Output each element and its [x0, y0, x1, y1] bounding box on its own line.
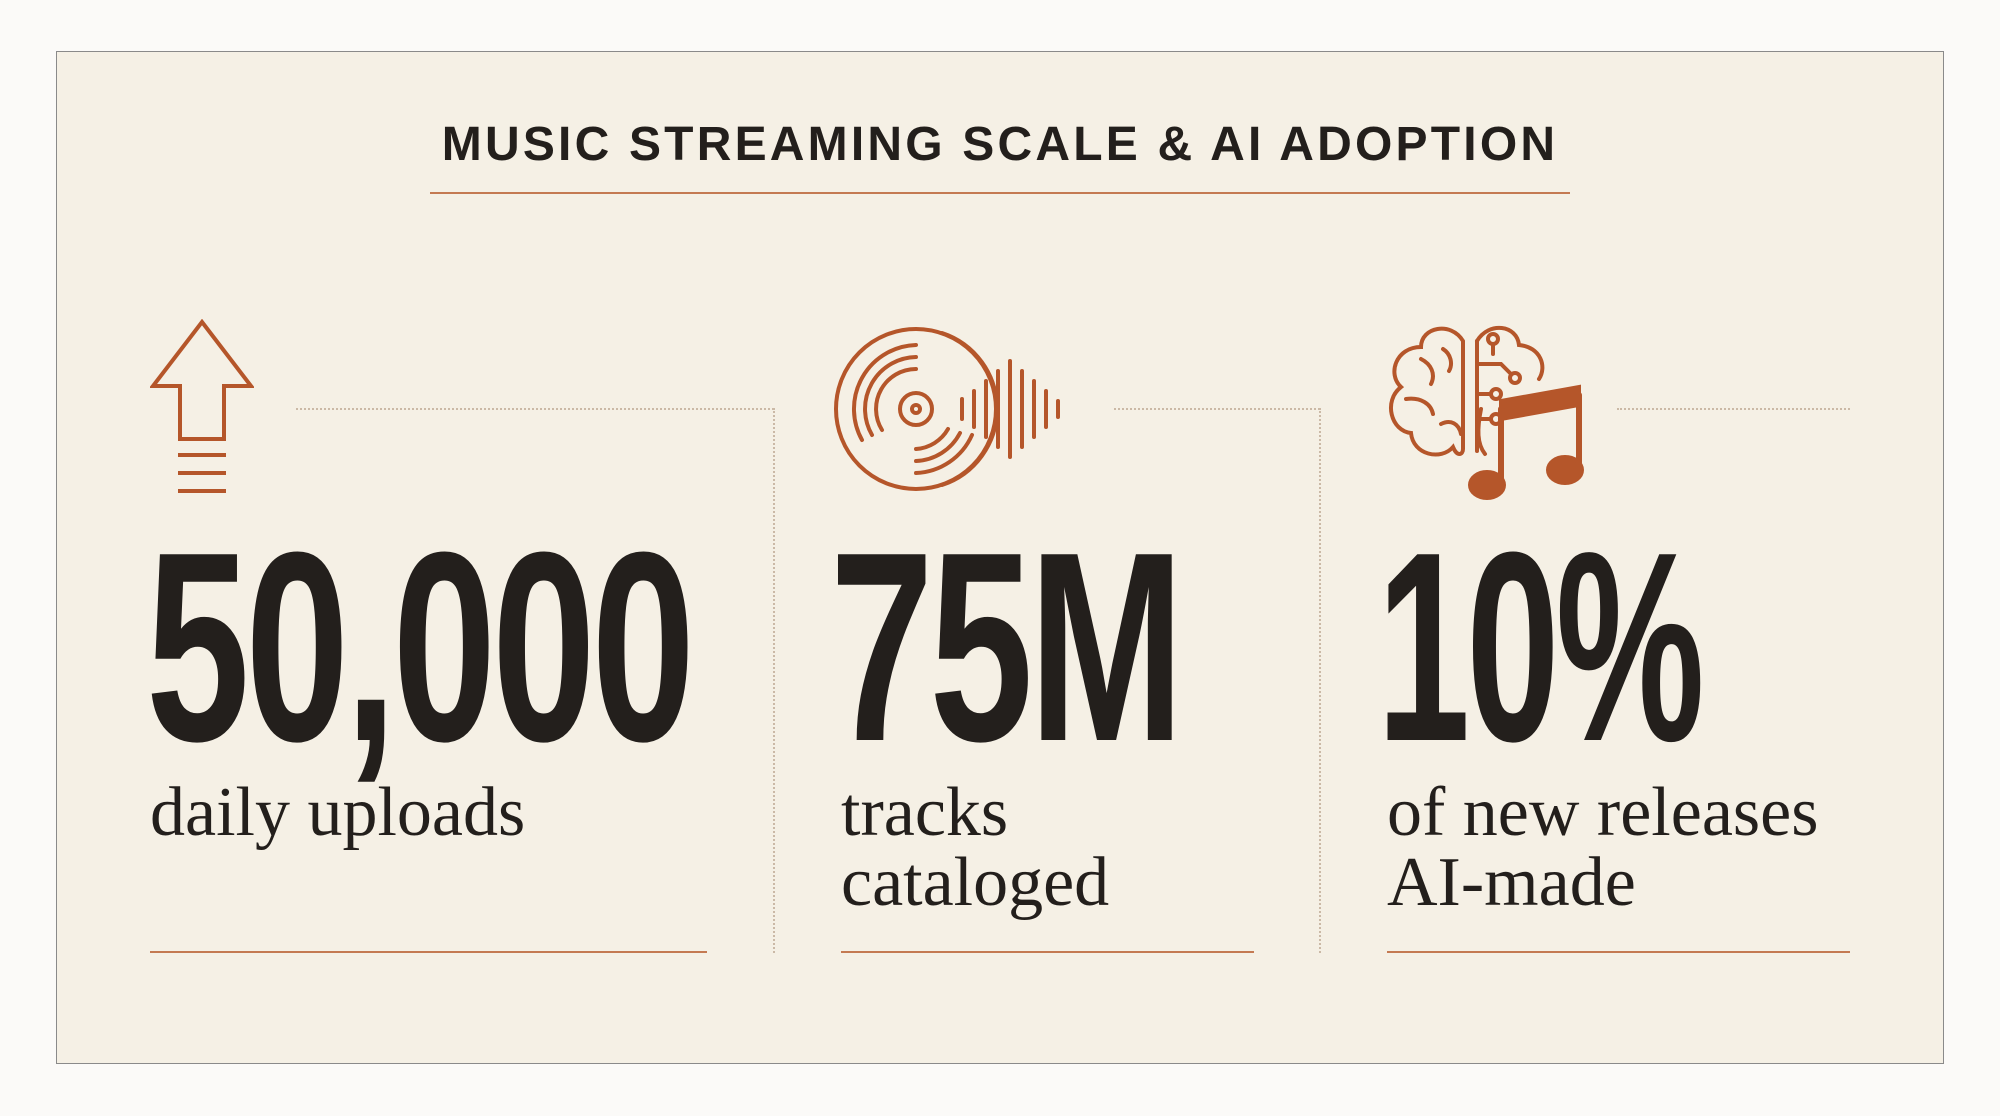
label: of new releases AI-made: AI-made [1387, 844, 1636, 921]
label: tracks cataloged: cataloged [841, 844, 1109, 921]
label: daily uploads: daily uploads [150, 774, 525, 851]
icon: brain with music note [1388, 326, 1584, 500]
title: MUSIC STREAMING SCALE & AI ADOPTION [442, 118, 1558, 171]
number: 75M: 75M [830, 497, 1180, 798]
panel: AI-made releases [1377, 326, 1850, 953]
label: tracks cataloged [841, 774, 1109, 921]
label: of new releases AI-made [1387, 774, 1818, 921]
icon: vinyl record with waveform [834, 327, 1060, 491]
label: tracks cataloged: tracks [841, 774, 1008, 851]
icon: upload arrow [150, 319, 254, 493]
panel: tracks cataloged [830, 327, 1254, 953]
label: of new releases AI-made: of new releases [1387, 774, 1818, 851]
panel: daily uploads [146, 319, 707, 953]
number: 10%: 10% [1377, 497, 1701, 798]
number: 50,000: 50,000 [146, 497, 691, 798]
